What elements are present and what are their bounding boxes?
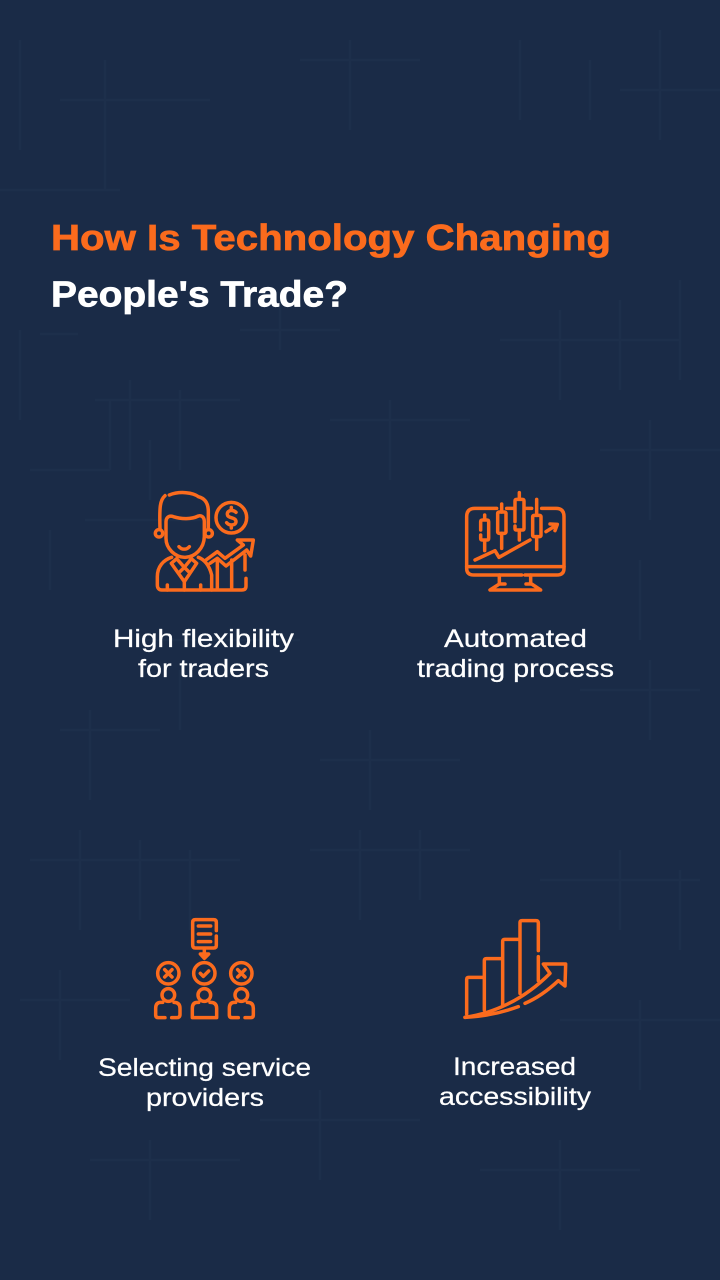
- panel: automated trading: [417, 493, 614, 683]
- icon: document selecting one of three people: [156, 920, 253, 1018]
- label: automated trading: trading process: [417, 655, 614, 683]
- label: high flexibility: High flexibility: [113, 625, 295, 653]
- title: [51, 217, 611, 314]
- icon: rising bars with arrow: [465, 921, 566, 1017]
- panel: high flexibility: [113, 493, 295, 683]
- panel: selecting providers: [98, 920, 311, 1112]
- label: increased accessibility: [439, 1053, 592, 1111]
- title: How Is Technology Changing: [51, 217, 611, 258]
- label: selecting providers: [98, 1054, 311, 1112]
- icon: monitor with candlesticks: [467, 493, 564, 590]
- label: automated trading: [417, 625, 614, 683]
- label: automated trading: Automated: [444, 625, 587, 653]
- label: selecting providers: Selecting service: [98, 1054, 311, 1082]
- icon: trader with rising chart: [155, 493, 253, 590]
- label: high flexibility: for traders: [138, 655, 269, 683]
- label: increased accessibility: accessibility: [439, 1083, 592, 1111]
- label: selecting providers: providers: [146, 1084, 264, 1112]
- label: high flexibility: [113, 625, 295, 683]
- label: increased accessibility: Increased: [453, 1053, 576, 1081]
- title: People's Trade?: [51, 274, 348, 314]
- panel: increased accessibility: [439, 921, 592, 1111]
